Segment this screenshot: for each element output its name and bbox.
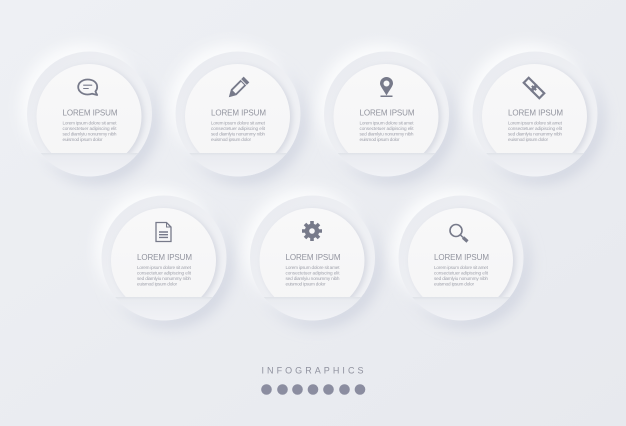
icon: magnifier <box>450 224 468 242</box>
body text <box>137 265 192 286</box>
body text: euismod ipsum dolor <box>286 282 326 286</box>
heading: LOREM IPSUM <box>434 253 489 262</box>
body text: Lorem ipsum dolore sit amet <box>62 120 117 126</box>
body text: Lorem ipsum dolore sit amet <box>286 265 340 270</box>
body text: euismod ipsum dolor <box>211 137 251 142</box>
card 7: magnifier <box>392 188 530 328</box>
body text: consectetuer adipiscing elit <box>137 270 192 276</box>
body text <box>286 265 340 286</box>
body text: sed diamlyiu nonummy nibh <box>211 132 265 136</box>
body text: Lorem ipsum dolore sit amet <box>434 265 489 270</box>
body text <box>62 120 117 142</box>
body text: Lorem ipsum dolore sit amet <box>508 120 563 126</box>
heading: LOREM IPSUM <box>360 108 415 118</box>
body text: consectetuer adipiscing elit <box>286 270 340 276</box>
body text: euismod ipsum dolor <box>434 282 474 286</box>
body text <box>508 120 563 142</box>
body text: Lorem ipsum dolore sit amet <box>137 265 192 270</box>
icon: pencil <box>226 77 249 100</box>
icon: document <box>156 222 171 242</box>
icon: chain link <box>524 78 544 98</box>
body text: sed diamlyiu nonummy nibh <box>137 276 191 281</box>
body text: euismod ipsum dolor <box>360 137 400 142</box>
card 1: speech bubble <box>20 44 158 184</box>
body text: sed diamlyiu nonummy nibh <box>286 276 340 281</box>
card 4: chain link <box>466 44 604 184</box>
heading: LOREM IPSUM <box>137 253 192 262</box>
card 6: gear <box>244 188 382 328</box>
heading: LOREM IPSUM <box>211 108 266 118</box>
body text: euismod ipsum dolor <box>137 282 177 286</box>
body text: euismod ipsum dolor <box>62 137 103 142</box>
title: infographics: INFOGRAPHICS <box>262 366 364 376</box>
body text: sed diamlyiu nonummy nibh <box>508 132 562 136</box>
heading: LOREM IPSUM <box>62 108 118 118</box>
body text: consectetuer adipiscing elit <box>62 126 117 131</box>
body text <box>434 265 489 286</box>
icon: speech bubble <box>78 80 97 95</box>
body text <box>211 120 266 142</box>
body text <box>360 120 414 142</box>
body text: Lorem ipsum dolore sit amet <box>360 120 414 126</box>
body text: consectetuer adipiscing elit <box>434 270 489 276</box>
body text: consectetuer adipiscing elit <box>508 126 563 131</box>
body text: consectetuer adipiscing elit <box>360 126 414 131</box>
card 2: pencil <box>169 44 307 184</box>
body text: euismod ipsum dolor <box>508 137 548 142</box>
heading: LOREM IPSUM <box>508 108 563 118</box>
heading: LOREM IPSUM <box>286 253 341 262</box>
icon: map pin <box>380 77 393 97</box>
body text: sed diamlyiu nonummy nibh <box>360 132 414 136</box>
card 5: document <box>95 188 233 328</box>
body text: Lorem ipsum dolore sit amet <box>211 120 266 126</box>
pagination dots <box>261 384 365 395</box>
body text: sed diamlyiu nonummy nibh <box>434 276 488 281</box>
body text: consectetuer adipiscing elit <box>211 126 266 131</box>
body text: sed diamlyiu nonummy nibh <box>62 132 117 136</box>
card 3: map pin <box>318 44 456 184</box>
icon: gear <box>302 221 322 241</box>
